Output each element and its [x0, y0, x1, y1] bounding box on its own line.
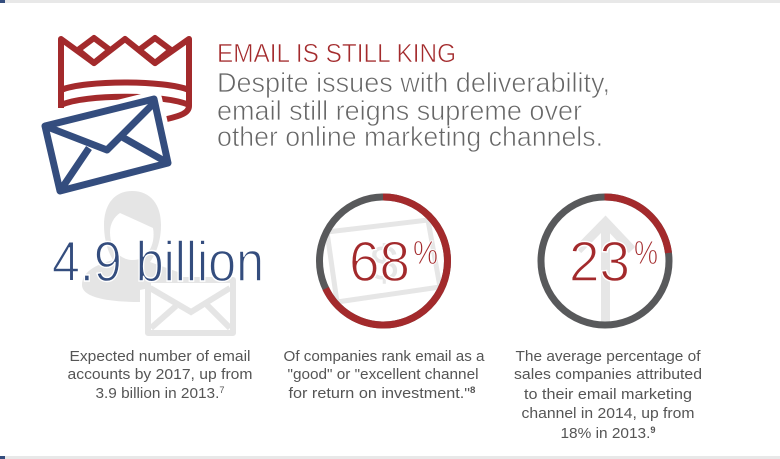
caption: sales attributed: 18% in 2013. — [560, 425, 648, 442]
caption: email accounts: 3.9 billion in 2013. — [96, 385, 216, 402]
caption: sales attributed: sales companies attributed — [514, 366, 702, 383]
donut chart: 23% — [541, 197, 669, 325]
caption: sales attributed — [514, 348, 702, 442]
stat: 4.9 billion: 4.9 billion — [52, 230, 264, 294]
caption: email accounts: accounts by 2017, up from — [68, 366, 252, 383]
caption: sales attributed: The average percentage of — [516, 348, 701, 365]
icon: up arrow — [578, 222, 632, 323]
caption: email accounts: 7 — [219, 385, 224, 395]
icon: person with envelope — [82, 191, 233, 333]
stat: 68%: 68 — [349, 230, 410, 294]
icon: crown — [61, 38, 189, 119]
stat: 23%: % — [634, 234, 658, 271]
caption: sales attributed: 9 — [650, 425, 656, 435]
caption: return on investment — [284, 348, 485, 402]
caption: return on investment: 8 — [470, 385, 476, 395]
caption: sales attributed: to their email marketing — [524, 386, 692, 403]
subheading: email still reigns supreme over — [217, 95, 582, 126]
stat: 68%: % — [413, 234, 438, 271]
subheading — [217, 67, 610, 152]
caption: return on investment: Of companies rank email as a — [284, 348, 485, 365]
caption: sales attributed: channel in 2014, up from — [522, 405, 694, 422]
donut chart: 68% — [320, 197, 448, 325]
caption: return on investment: "good" or "excellent channel — [288, 366, 478, 383]
subheading: other online marketing channels. — [217, 121, 603, 152]
icon: dollar bill — [327, 220, 440, 302]
icon: dollar bill: $ — [370, 235, 398, 291]
subheading: Despite issues with deliverability, — [217, 67, 610, 98]
stat: 23%: 23 — [569, 230, 630, 294]
caption: return on investment: for return on investment." — [288, 385, 456, 402]
caption: email accounts — [68, 348, 252, 402]
caption: email accounts: Expected number of email — [70, 348, 250, 365]
heading: EMAIL IS STILL KING — [217, 38, 456, 68]
icon: envelope — [45, 99, 168, 191]
